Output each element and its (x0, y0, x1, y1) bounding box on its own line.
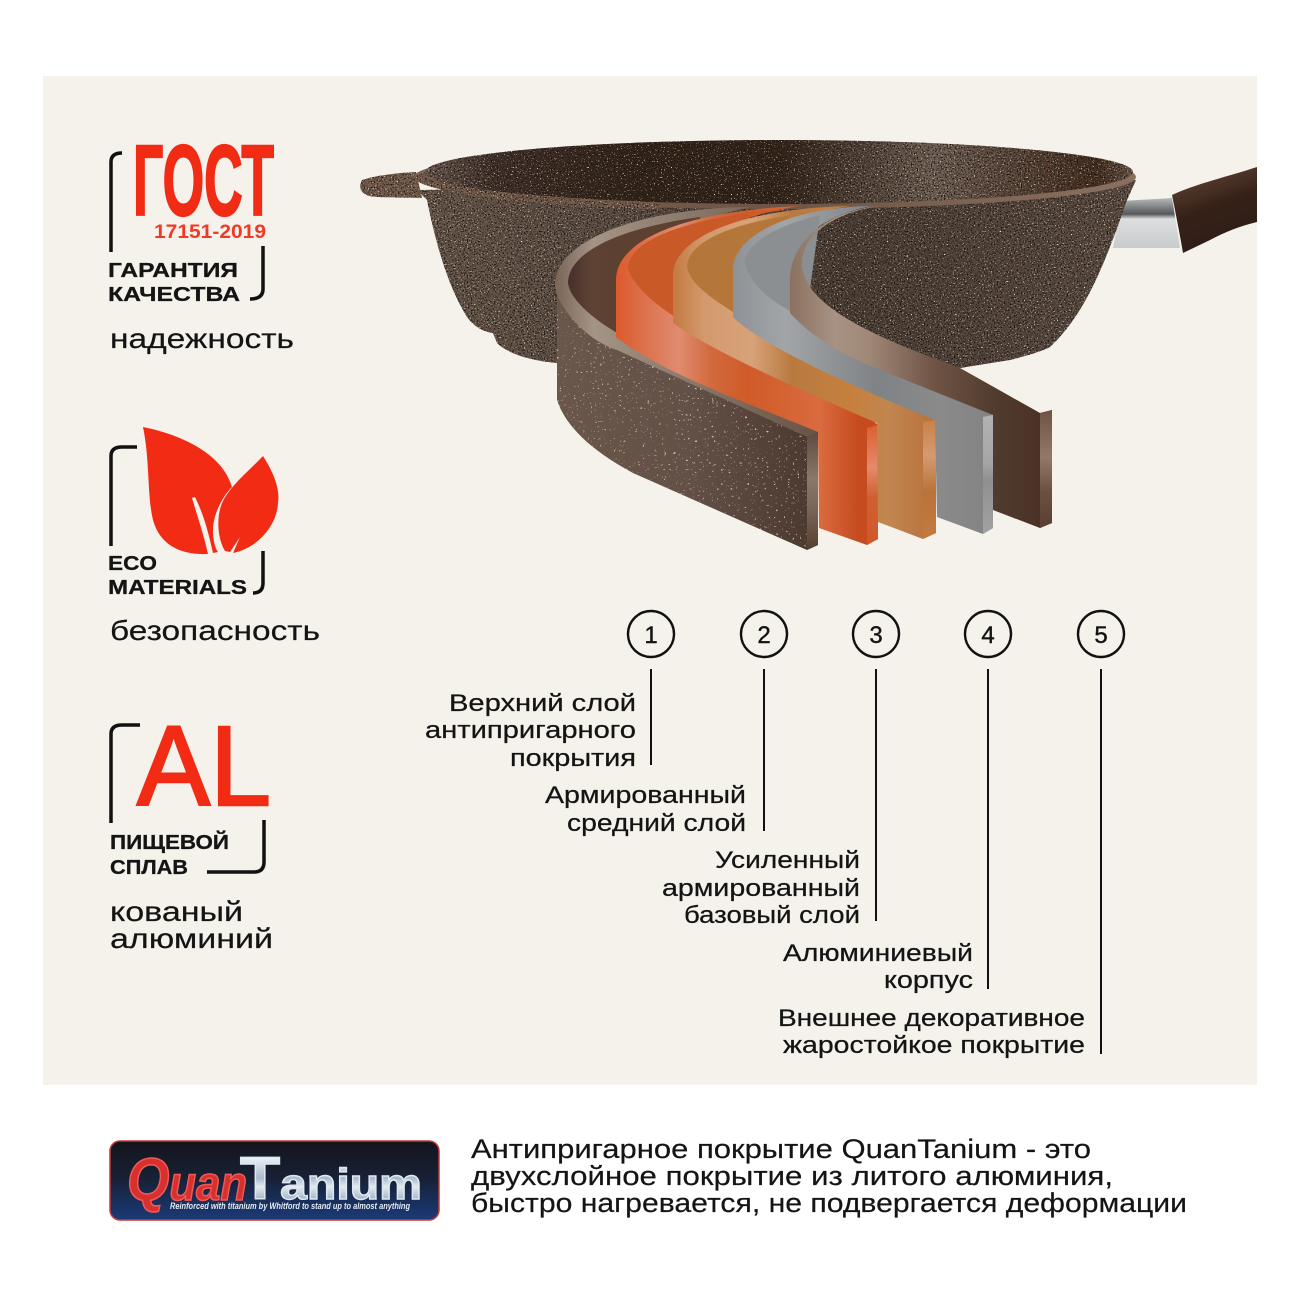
layer callout 3: Усиленный (715, 847, 860, 874)
pan rim speckled left part (414, 172, 660, 209)
AL heading: AL (137, 703, 271, 829)
QuanTanium logo: Tanium (240, 1145, 422, 1212)
AL bracket (111, 725, 264, 872)
layer callout 2: Армированный (545, 782, 746, 809)
quality guarantee text (108, 259, 240, 306)
layer callout 5: Внешнее декоративное (778, 1005, 1085, 1032)
badge: AL (110, 703, 271, 879)
layer callout 2: 2 (757, 622, 771, 649)
caption: forged aluminium: кованый (110, 896, 243, 927)
pan handle (1113, 167, 1257, 253)
badge: eco materials (108, 427, 278, 599)
background panel (43, 76, 1257, 1085)
food alloy text: ПИЩЕВОЙ (110, 830, 229, 854)
layer 1: granite outer coating (555, 207, 818, 550)
badge: GOST (108, 125, 274, 306)
layer 4: grey aluminium body (733, 206, 993, 534)
layer callout 1: 1 (644, 622, 658, 649)
QuanTanium logo: Quan (127, 1146, 247, 1213)
layer callout 1: Верхний слой (449, 690, 636, 717)
layer callout 2: средний слой (567, 810, 746, 837)
layer 5: brown heat resistant coating (790, 206, 1052, 528)
GOST bracket (111, 153, 263, 299)
GOST number: 17151-2019 (154, 222, 266, 243)
layer callout 2 (545, 611, 787, 837)
coating description: Антипригарное покрытие QuanTanium - это (471, 1134, 1091, 1164)
layer 3: copper base layer (673, 206, 936, 539)
quality guarantee text: ГАРАНТИЯ (108, 259, 238, 282)
layer callout 3: 3 (869, 622, 883, 649)
eco text: MATERIALS (108, 576, 247, 599)
layer callout 4 (783, 611, 1011, 994)
layer callout 4: корпус (884, 967, 973, 994)
QuanTanium logo: Reinforced with titanium by Whitford to stand up to almost anything (170, 1201, 410, 1212)
layer callout 3: базовый слой (684, 902, 860, 929)
eco text: ECO (108, 552, 157, 575)
coating description: быстро нагревается, не подвергается деформации (471, 1188, 1187, 1218)
frying pan with cut-away layers (360, 140, 1257, 550)
pan body (417, 180, 1136, 368)
layer callout 1: антипригарного (425, 717, 636, 744)
layer callout 4: 4 (981, 622, 995, 649)
layer callout 5: 5 (1094, 622, 1108, 649)
pan side lug (360, 172, 422, 198)
coating description: двухслойное покрытие из литого алюминия, (471, 1161, 1113, 1191)
icon: leaves (143, 427, 278, 554)
quality guarantee text: КАЧЕСТВА (108, 283, 240, 306)
layer 2: orange reinforced middle layer (616, 206, 878, 545)
layer callout 3: армированный (662, 875, 860, 902)
layer callout 5: жаростойкое покрытие (783, 1032, 1085, 1059)
layer callout 1: покрытия (510, 745, 636, 772)
GOST heading: ГОСТ (133, 125, 274, 237)
coating description (471, 1134, 1187, 1218)
pan rim (414, 145, 1136, 209)
caption: forged aluminium (110, 896, 273, 954)
eco bracket (111, 447, 263, 593)
food alloy text: СПЛАВ (110, 856, 188, 879)
layer callout 4: Алюминиевый (783, 940, 973, 967)
layer callout 5 (778, 611, 1124, 1059)
eco text (108, 552, 247, 599)
caption: safety: безопасность (110, 615, 320, 646)
food alloy text (110, 830, 229, 879)
caption: reliability: надежность (110, 323, 294, 354)
pan interior (425, 140, 1133, 204)
caption: forged aluminium: алюминий (110, 923, 273, 954)
layer callout 3 (662, 611, 899, 929)
QuanTanium logo (110, 1141, 439, 1220)
layer callout 1 (425, 611, 674, 772)
